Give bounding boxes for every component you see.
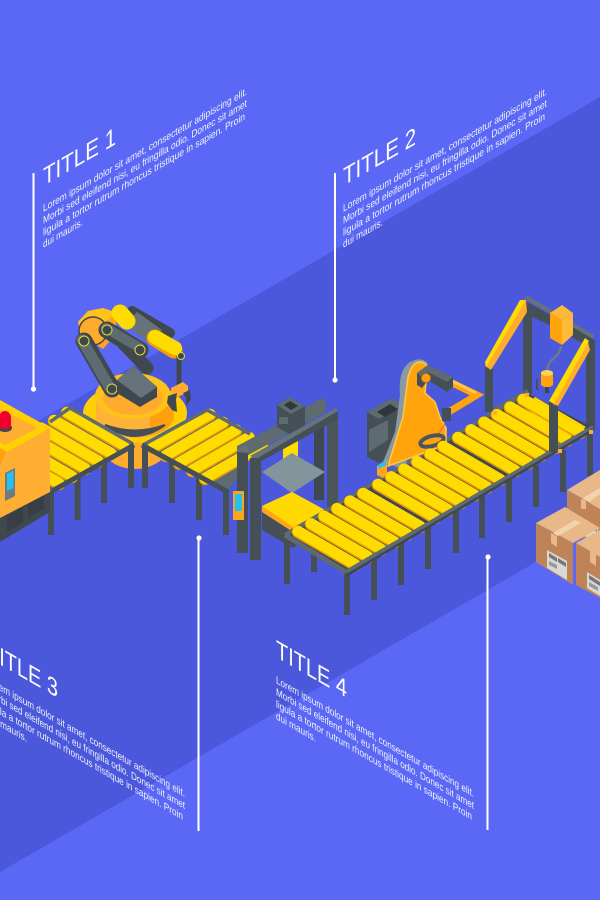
body: title 2: ligula a tortor rutrum rhoncus tristique in sapien. Proin	[343, 111, 545, 239]
gantry front frame	[549, 338, 590, 452]
robot orange plate	[388, 362, 446, 466]
press base	[262, 510, 326, 548]
main conveyor	[285, 359, 593, 575]
lower left box	[536, 507, 600, 585]
press yellow pad	[262, 492, 325, 532]
control cabinet	[0, 400, 50, 542]
text block: title 4	[276, 635, 475, 836]
centre conveyor	[142, 409, 262, 492]
text block: title 1	[43, 86, 248, 251]
upper box	[567, 470, 600, 548]
body: title 1: dui mauris.	[43, 217, 83, 251]
leader line: title 3	[196, 535, 202, 831]
cabinet screen panel	[5, 468, 15, 501]
conveyor back rail	[285, 393, 527, 535]
heading: title 2: TITLE 2	[343, 122, 416, 192]
body: title 1: Morbi sed eleifend nisi, eu fringilla odio. Donec sit amet	[43, 98, 248, 227]
cabinet base	[0, 490, 50, 542]
body: title 1: ligula a tortor rutrum rhoncus tristique in sapien. Proin	[43, 111, 245, 239]
body: title 4: dui mauris.	[276, 711, 316, 745]
body: title 2: dui mauris.	[343, 217, 383, 251]
robot orange hub	[78, 308, 127, 349]
body: title 4: ligula a tortor rutrum rhoncus tristique in sapien. Proin	[276, 699, 472, 823]
centre conveyor legs	[142, 445, 229, 535]
robot grey head	[417, 365, 453, 421]
robot upper arm	[102, 325, 145, 355]
conveyor bed	[0, 407, 133, 520]
left conveyor legs	[48, 445, 134, 535]
text block: title 3	[0, 635, 186, 836]
robot orange arm	[447, 380, 477, 413]
robot gripper	[167, 352, 191, 412]
conveyor rails	[142, 410, 250, 492]
press rear beam	[237, 418, 296, 458]
body: title 4: Morbi sed eleifend nisi, eu fringilla odio. Donec sit amet	[276, 687, 475, 812]
conveyor rollers group 1	[298, 493, 420, 565]
robot rear arm	[123, 311, 170, 368]
body: title 4: Lorem ipsum dolor sit amet, consectetur adipiscing elit.	[276, 675, 474, 800]
press yellow piston	[283, 440, 298, 471]
conveyor bed	[285, 393, 592, 572]
gantry rear frame	[485, 296, 595, 430]
conveyor rollers group 2	[378, 446, 500, 518]
conveyor rollers	[2, 412, 124, 484]
gantry head unit	[536, 305, 573, 393]
left conveyor	[0, 407, 134, 520]
leader line: title 1	[31, 173, 36, 392]
robot yellow forearm	[155, 337, 175, 350]
robot base disc	[83, 373, 187, 469]
press table	[262, 453, 325, 493]
conveyor bed	[143, 409, 262, 491]
robot ring gripper	[419, 424, 445, 449]
drill head	[536, 370, 553, 393]
robot cabinet placed behind rollers	[367, 398, 403, 463]
red alarm light	[0, 411, 12, 432]
robot pedestal	[117, 366, 157, 407]
conveyor front rails	[285, 427, 593, 575]
gantry rear-left yellow strut	[485, 300, 527, 370]
heading: title 4: TITLE 4	[276, 635, 347, 704]
text block: title 2	[343, 86, 548, 251]
lower right box	[576, 530, 600, 598]
cabinet body	[0, 400, 50, 518]
gantry orange feet	[493, 393, 593, 453]
conveyor rollers group 3	[458, 399, 580, 471]
press control panel	[233, 491, 244, 520]
press front beam	[250, 408, 338, 463]
robot control panel	[377, 460, 387, 478]
body: title 2: Lorem ipsum dolor sit amet, consectetur adipiscing elit.	[343, 86, 547, 215]
orange actuator box	[550, 305, 573, 345]
robot grey shell	[383, 359, 428, 470]
robot lower arm	[79, 336, 117, 394]
body: title 2: Morbi sed eleifend nisi, eu fringilla odio. Donec sit amet	[343, 98, 548, 227]
conveyor rails	[50, 408, 134, 491]
press rear posts	[314, 413, 338, 507]
main conveyor legs	[284, 434, 593, 615]
body: title 1: Lorem ipsum dolor sit amet, consectetur adipiscing elit.	[43, 86, 247, 215]
leader line: title 4	[485, 554, 491, 830]
heading: title 1: TITLE 1	[43, 122, 116, 192]
yellow plate under the gantry	[523, 397, 586, 438]
cardboard boxes	[536, 470, 600, 598]
leader line: title 2	[332, 173, 338, 383]
press station	[233, 397, 338, 560]
press front posts	[237, 445, 261, 560]
conveyor rollers	[153, 414, 262, 479]
press head	[277, 397, 326, 435]
cable	[547, 346, 561, 372]
robot arm station	[78, 308, 191, 469]
